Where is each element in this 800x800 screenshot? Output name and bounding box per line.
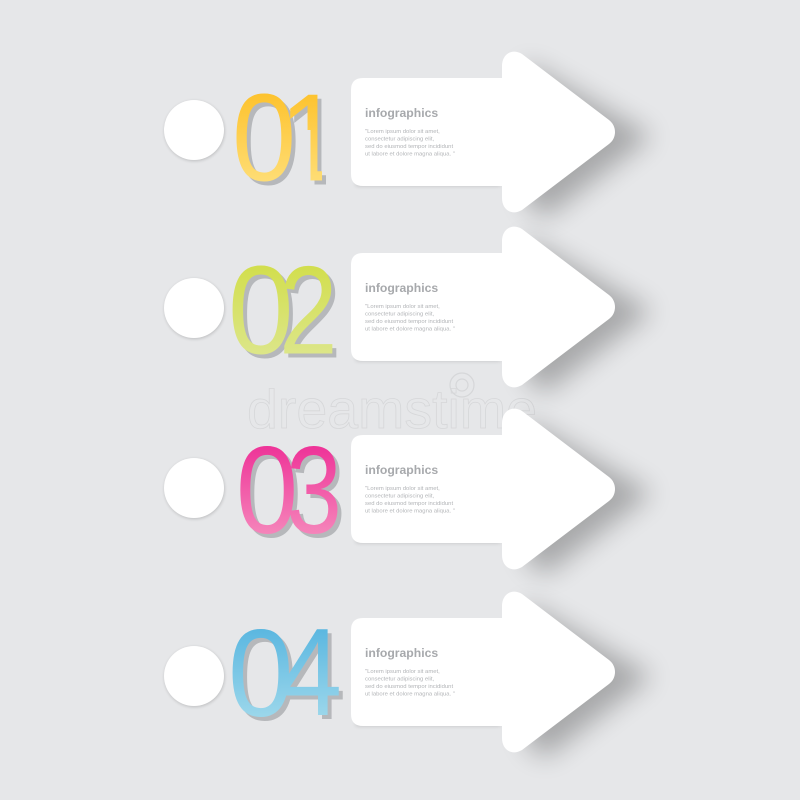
text block: consectetur adipiscing elit,: [365, 494, 434, 500]
heading: infographics: [365, 281, 438, 295]
text block: ut labore et dolore magna aliqua. ": [365, 152, 455, 158]
text block: ut labore et dolore magna aliqua. ": [365, 508, 455, 514]
number 02: 2: [283, 244, 342, 385]
watermark: dreamstime: [247, 378, 537, 440]
heading: infographics: [365, 646, 438, 660]
number 01: 1: [284, 72, 346, 211]
number 02: 0: [232, 244, 298, 384]
number 01: 1: [280, 68, 342, 207]
text block: ut labore et dolore magna aliqua. ": [365, 326, 455, 332]
text block: sed do eiusmod tempor incididunt: [365, 144, 453, 150]
number 04: 0: [228, 604, 294, 743]
text block: [365, 129, 455, 158]
icon: circle 02: [164, 278, 224, 339]
text block: [365, 304, 455, 332]
number 01: [236, 94, 326, 186]
heading: infographics: [365, 106, 438, 120]
arrow 01: [351, 52, 652, 218]
icon: circle 04: [164, 646, 224, 707]
text block: "Lorem ipsum dolor sit amet,: [365, 129, 440, 135]
number 02: 0: [228, 240, 294, 380]
number 03: 3: [286, 421, 342, 559]
panel: step 03: [164, 409, 652, 575]
icon: circle 03: [164, 458, 224, 519]
number 04: 0: [232, 608, 298, 747]
number 01: 0: [232, 70, 296, 207]
number 03: 3: [290, 425, 346, 563]
panel: step 01: [164, 52, 652, 218]
number 03: [236, 421, 346, 563]
text block: "Lorem ipsum dolor sit amet,: [365, 304, 440, 310]
arrow 02: [351, 227, 652, 393]
text block: "Lorem ipsum dolor sit amet,: [365, 669, 440, 675]
arrow 03: [351, 409, 652, 575]
text block: sed do eiusmod tempor incididunt: [365, 319, 453, 325]
panel: step 02: [164, 227, 652, 393]
text block: consectetur adipiscing elit,: [365, 136, 434, 142]
number 01: 0: [236, 74, 300, 211]
number 04: 4: [282, 608, 346, 746]
text block: ut labore et dolore magna aliqua. ": [365, 692, 455, 698]
arrow 04: [351, 592, 652, 758]
text block: consectetur adipiscing elit,: [365, 676, 434, 682]
icon: circle 01: [164, 100, 224, 161]
number 03: 0: [236, 421, 298, 559]
text block: [365, 669, 455, 698]
number 02: 2: [279, 240, 338, 381]
number 03: 0: [240, 425, 302, 563]
number 02: [228, 240, 342, 385]
heading: infographics: [365, 463, 438, 477]
text block: sed do eiusmod tempor incididunt: [365, 501, 453, 507]
panel: step 04: [164, 592, 652, 758]
text block: [365, 486, 455, 514]
text block: "Lorem ipsum dolor sit amet,: [365, 486, 440, 492]
text block: consectetur adipiscing elit,: [365, 312, 434, 318]
number 04: 4: [278, 604, 342, 742]
number 04: [228, 604, 346, 747]
text block: sed do eiusmod tempor incididunt: [365, 684, 453, 690]
